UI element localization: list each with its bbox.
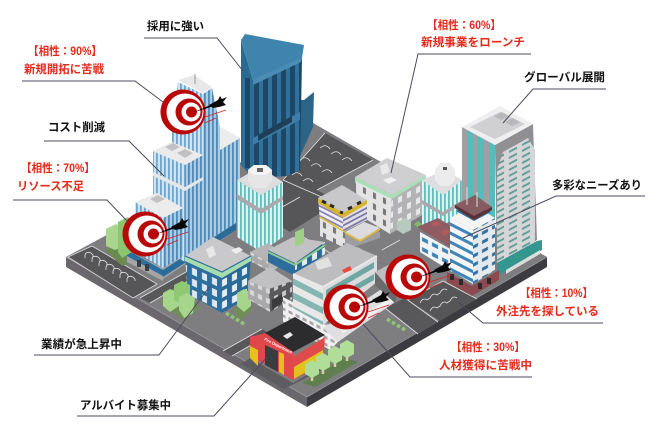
building: podium	[127, 223, 236, 281]
callout: 相性70%	[13, 161, 128, 222]
callout: コスト削減: コスト削減	[48, 120, 105, 134]
building: blue tower	[241, 34, 314, 178]
target: 30%	[324, 284, 390, 330]
trees: beside podium	[105, 217, 132, 266]
building: middle light-blue tower	[153, 142, 203, 262]
building: rear white green office	[355, 158, 426, 234]
parking lot: right	[408, 281, 477, 321]
building: gray block behind teal-blue	[250, 243, 290, 272]
hedges: lower road	[387, 319, 405, 330]
callout: 相性30%	[363, 324, 532, 377]
building: large white office	[283, 243, 395, 350]
callout: 相性90%	[22, 44, 163, 102]
callout: 相性70%: 【相性：70%】	[21, 161, 95, 175]
building: fire department: Fire Department	[264, 336, 294, 355]
callout: 相性60%	[391, 18, 531, 173]
building: low gray near targets	[375, 264, 415, 304]
building: right small teal tower	[422, 163, 462, 225]
callout: 採用に強い: 採用に強い	[147, 19, 204, 33]
building: fire department	[241, 317, 330, 389]
callout: 業績が急上昇中	[34, 286, 210, 355]
target: 70%	[122, 212, 189, 256]
callout: 相性30%: 人材獲得に苦戦中	[439, 358, 532, 372]
target: 90%	[160, 90, 227, 134]
building: blue office front	[185, 237, 251, 313]
callout: 相性30%: 【相性：30%】	[451, 340, 525, 354]
callout: 相性10%: 【相性：10%】	[520, 286, 593, 300]
callout: 相性60%: 【相性：60%】	[427, 18, 501, 32]
callout: 相性10%: 外注先を探している	[496, 304, 599, 318]
callout: グローバル展開: グローバル展開	[524, 70, 605, 84]
callout: グローバル展開	[503, 70, 606, 123]
callout: コスト削減	[44, 120, 164, 176]
callout: 業績が急上昇中: 業績が急上昇中	[41, 337, 122, 351]
trees: central small	[348, 247, 376, 280]
city base platform	[66, 123, 547, 407]
building: yellow striped	[318, 185, 380, 250]
callout: アルバイト募集中: アルバイト募集中	[80, 398, 171, 412]
callout: 多彩なニーズあり	[463, 178, 645, 238]
building: teal-blue roof garden	[268, 228, 325, 276]
trees: front row	[302, 340, 358, 387]
callout: 採用に強い	[144, 19, 243, 71]
trees: blue office	[160, 281, 252, 324]
building: center teal tower	[237, 165, 283, 252]
callout: アルバイト募集中	[77, 357, 267, 416]
parking lot: left	[68, 246, 157, 298]
callout: 相性70%: リソース不足	[17, 180, 84, 193]
building: white low side with brown roof	[417, 218, 452, 272]
callout: 相性90%: 新規開拓に苦戦	[24, 62, 104, 76]
callout: 多彩なニーズあり: 多彩なニーズあり	[552, 178, 642, 192]
building: small gray	[248, 267, 292, 312]
building: white and blue striped	[447, 187, 499, 296]
callout: 相性90%: 【相性：90%】	[28, 44, 102, 58]
road: lower segments	[140, 225, 438, 356]
building: tall teal tower and annex	[462, 106, 542, 276]
callout: 相性10%	[458, 286, 603, 323]
building: rear light-blue tower	[172, 74, 240, 250]
parking lot: back	[262, 133, 373, 232]
building: front light-blue tower	[135, 193, 183, 268]
target: 10%	[386, 254, 452, 300]
callout: 相性60%: 新規事業をローンチ	[421, 35, 525, 49]
